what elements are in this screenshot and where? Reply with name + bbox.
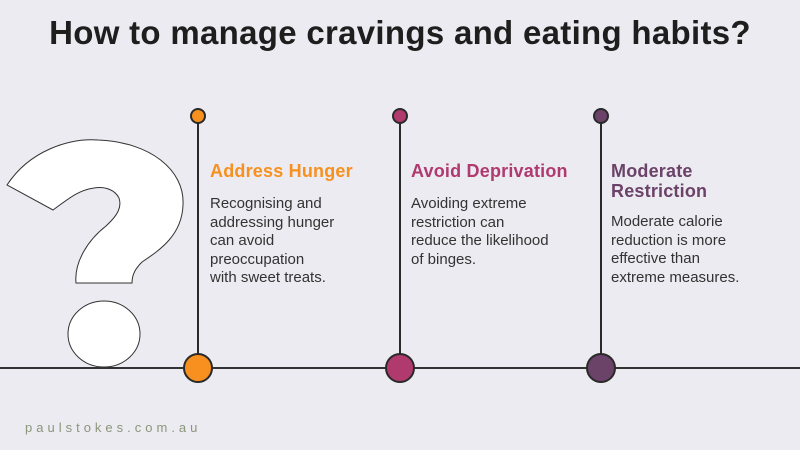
heading: moderate restriction (611, 161, 707, 201)
text: address hunger: Recognising and (210, 195, 322, 212)
text: moderate restriction: effective than (611, 250, 700, 267)
text: avoid deprivation: restriction can (411, 214, 504, 230)
text: avoid deprivation: of binges. (411, 250, 476, 268)
icon: question mark (7, 140, 183, 367)
text: address hunger: with sweet treats. (210, 269, 326, 286)
text: avoid deprivation (411, 195, 549, 268)
heading: moderate restriction: Moderate (611, 161, 693, 181)
marker: address hunger (184, 109, 212, 382)
text: avoid deprivation: Avoiding extreme (411, 195, 527, 212)
text: moderate restriction: extreme measures. (611, 268, 739, 286)
text: address hunger: can avoid (210, 232, 274, 249)
horizontal axis (0, 367, 800, 369)
marker: moderate restriction (587, 109, 615, 382)
heading: moderate restriction: Restriction (611, 181, 707, 201)
footer: paulstokes.com.au (25, 420, 201, 435)
text: address hunger: addressing hunger (210, 214, 334, 230)
text: moderate restriction: reduction is more (611, 232, 726, 248)
text: moderate restriction (611, 213, 739, 286)
text: moderate restriction: Moderate calorie (611, 213, 723, 230)
title: How to manage cravings and eating habits? (49, 14, 751, 51)
marker: avoid deprivation (386, 109, 414, 382)
text: avoid deprivation: reduce the likelihood (411, 232, 549, 249)
heading: address hunger: Address Hunger (210, 161, 353, 181)
text: address hunger: preoccupation (210, 250, 304, 268)
heading: avoid deprivation: Avoid Deprivation (411, 161, 568, 181)
text: address hunger (210, 195, 334, 286)
